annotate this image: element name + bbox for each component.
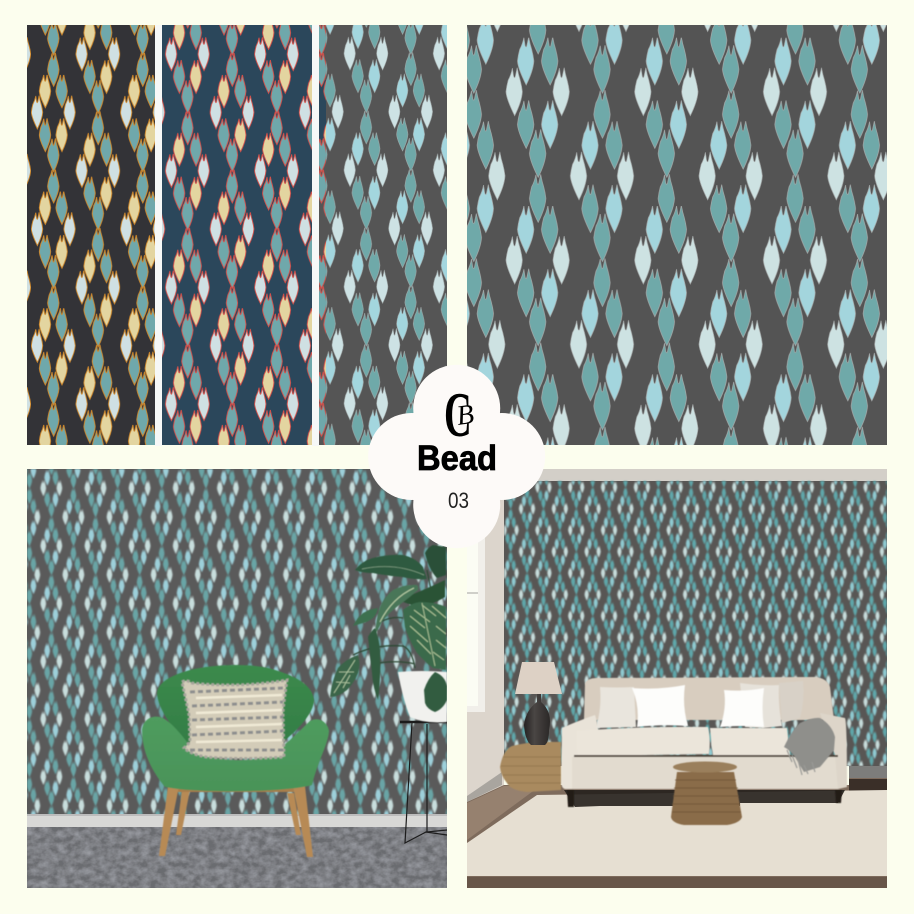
baseboard (27, 814, 447, 827)
side table pouf (500, 742, 561, 792)
plant pot (398, 671, 447, 722)
sofa legs (567, 790, 842, 807)
rug (467, 790, 887, 876)
front leaf (424, 672, 447, 712)
right baseboard (849, 766, 887, 779)
window (467, 538, 485, 712)
green armchair (142, 665, 329, 857)
carpet (27, 827, 447, 888)
panel: grey colourway swatch (319, 25, 447, 445)
panel: large pattern swatch (467, 25, 887, 445)
white gutters between swatches (155, 25, 319, 446)
panel: navy colourway swatch (162, 25, 312, 445)
left baseboard (467, 772, 502, 802)
ceiling (538, 469, 887, 481)
cushion (182, 680, 287, 758)
sofa (561, 677, 847, 807)
badge: quatrefoil (368, 365, 545, 548)
wicker coffee table (671, 762, 742, 825)
plant (330, 545, 446, 700)
panel: sofa room mockup (467, 469, 887, 888)
logo monogram: C (444, 380, 472, 451)
number: 03: 03 (448, 488, 469, 513)
plant stand (400, 722, 447, 843)
wallpapered wall (27, 469, 447, 815)
panel: dark colourway swatch (27, 25, 155, 445)
left side wall (467, 481, 504, 806)
logo monogram: B (455, 399, 476, 432)
wood floor (467, 778, 887, 888)
wallpapered wall (504, 481, 887, 766)
grey throw (784, 718, 835, 775)
chair legs (159, 786, 313, 857)
title: Bead: Bead (417, 439, 497, 478)
shadow under sofa (564, 790, 845, 807)
panel: chair room mockup (27, 469, 447, 888)
sofa pillows (596, 681, 804, 728)
table lamp (515, 662, 562, 745)
